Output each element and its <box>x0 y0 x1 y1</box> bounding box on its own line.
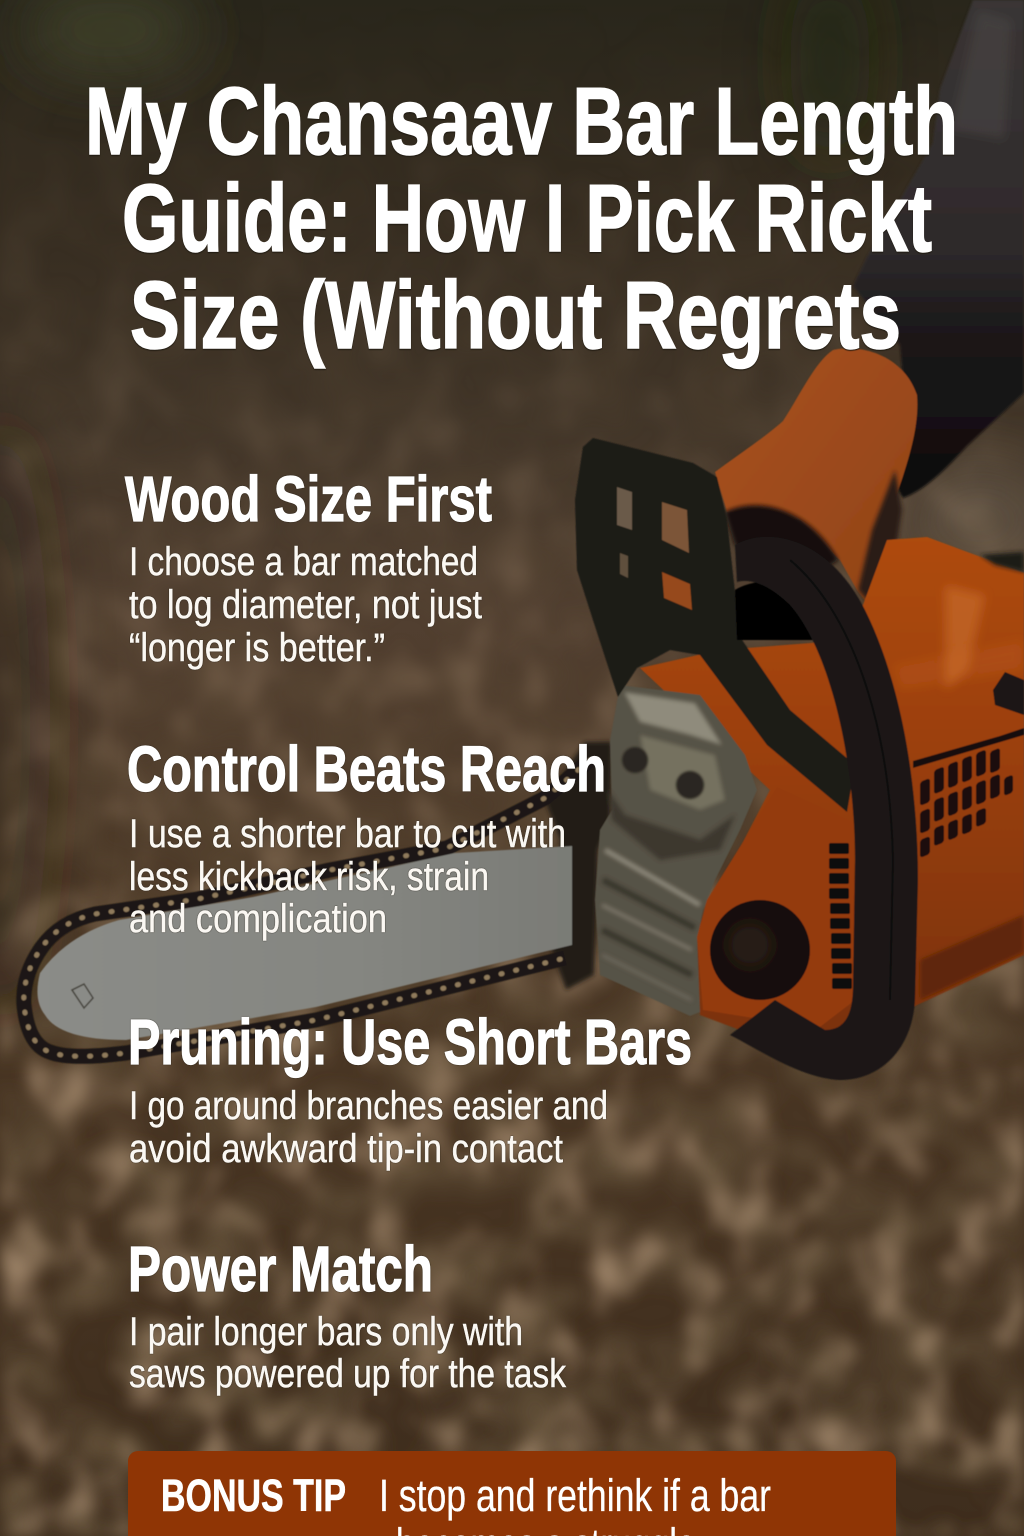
label: BONUS TIP <box>161 1470 346 1521</box>
orange engine body <box>640 537 1024 1040</box>
heading: Pruning: Use Short Bars <box>128 1006 692 1078</box>
side vents <box>920 738 1013 858</box>
sleeve <box>853 0 1024 498</box>
heading: Wood Size First <box>125 463 492 535</box>
starter disc <box>710 900 810 1000</box>
body text: I go around branches easier and <box>129 1084 608 1128</box>
section: pruning <box>128 1006 692 1171</box>
body text: and complication <box>129 897 387 941</box>
photo: chainsaw held in gloved hand <box>24 0 1024 1080</box>
front hand guard <box>575 438 855 812</box>
section: power match <box>128 1233 567 1396</box>
callout: bonus tip <box>128 1451 896 1536</box>
body text: to log diameter, not just <box>129 583 482 627</box>
body text: I choose a bar matched <box>129 540 478 584</box>
body text <box>129 540 482 670</box>
guide bar <box>37 846 572 1040</box>
tip text: I stop and rethink if a bar <box>379 1470 771 1521</box>
dark sprocket and chain base <box>545 742 612 990</box>
vertical vent slats <box>829 843 852 989</box>
title <box>85 68 958 369</box>
section: wood size first <box>125 463 492 670</box>
section: control beats reach <box>127 733 606 941</box>
body text <box>129 1084 608 1171</box>
body text: less kickback risk, strain <box>129 855 489 899</box>
guide bar chain <box>24 760 590 1056</box>
tip text <box>379 1470 771 1536</box>
body text: I use a shorter bar to cut with <box>129 812 566 856</box>
body text: I pair longer bars only with <box>129 1310 523 1354</box>
silver engine block <box>595 685 757 1016</box>
body text: saws powered up for the task <box>129 1352 567 1396</box>
body text: avoid awkward tip-in contact <box>129 1127 563 1171</box>
glove <box>715 348 917 620</box>
rear handle <box>730 537 918 1080</box>
lower orange housing <box>697 787 855 1027</box>
body text: “longer is better.” <box>129 626 385 670</box>
heading: Control Beats Reach <box>127 733 606 805</box>
body text <box>129 1310 567 1396</box>
heading: Power Match <box>128 1233 433 1305</box>
body text <box>129 812 566 941</box>
